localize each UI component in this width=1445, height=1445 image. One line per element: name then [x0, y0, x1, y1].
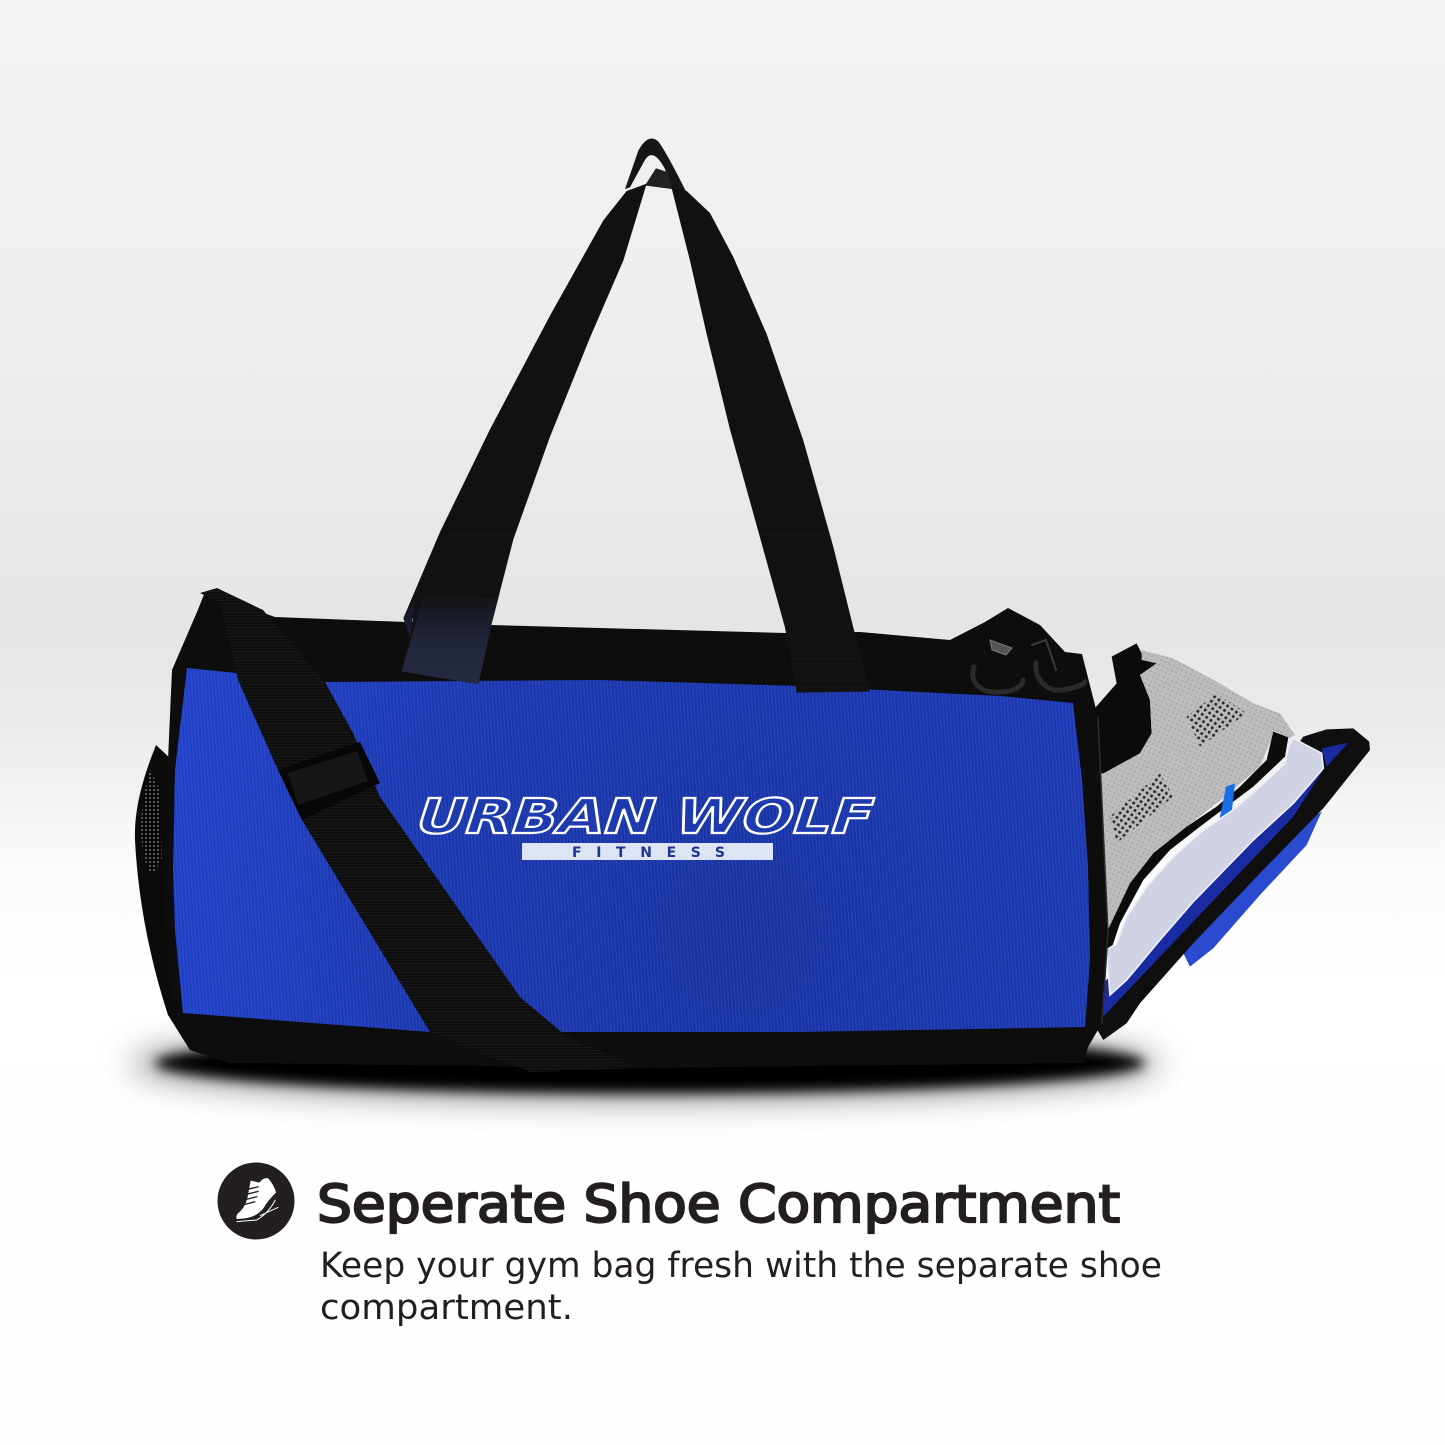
strap buckle: [278, 742, 380, 820]
shoe midsole black stripe: [1100, 732, 1288, 953]
compartment flap and shoe: [1093, 643, 1370, 1040]
blue flap underside: [1180, 812, 1322, 967]
bag body black base: [164, 592, 1108, 1068]
shoe collar lining: [1093, 643, 1157, 780]
zipper pulls: [973, 640, 1108, 1023]
side mesh pocket: [135, 745, 190, 1050]
shoe perforated panels: [1110, 693, 1247, 843]
brand logo: [408, 788, 883, 861]
front blue fabric panel: [173, 668, 1090, 1032]
front left handle: [402, 184, 647, 684]
fitness label: FITNESS: [572, 845, 725, 861]
front right handle: [672, 188, 870, 693]
fitness bar: [522, 843, 773, 860]
shoe blue accent: [1219, 783, 1235, 820]
brand name: URBAN WOLF: [408, 788, 883, 845]
black flap edge: [1093, 728, 1370, 1040]
feature caption: [218, 1162, 1162, 1328]
shoe white sole: [1107, 738, 1323, 995]
shoulder strap: [200, 588, 636, 1072]
icon: running shoe: [218, 1162, 294, 1240]
description line two: compartment.: [320, 1288, 573, 1328]
back handle loop: [625, 138, 687, 193]
shoe mesh upper: [1093, 650, 1295, 950]
ground shadow: [130, 1028, 1160, 1100]
description line one: Keep your gym bag fresh with the separate shoe: [320, 1246, 1162, 1286]
product: gym bag: [135, 138, 1370, 1072]
flap interior: [1103, 743, 1348, 1017]
heading: Seperate Shoe Compartment: [317, 1175, 1120, 1235]
